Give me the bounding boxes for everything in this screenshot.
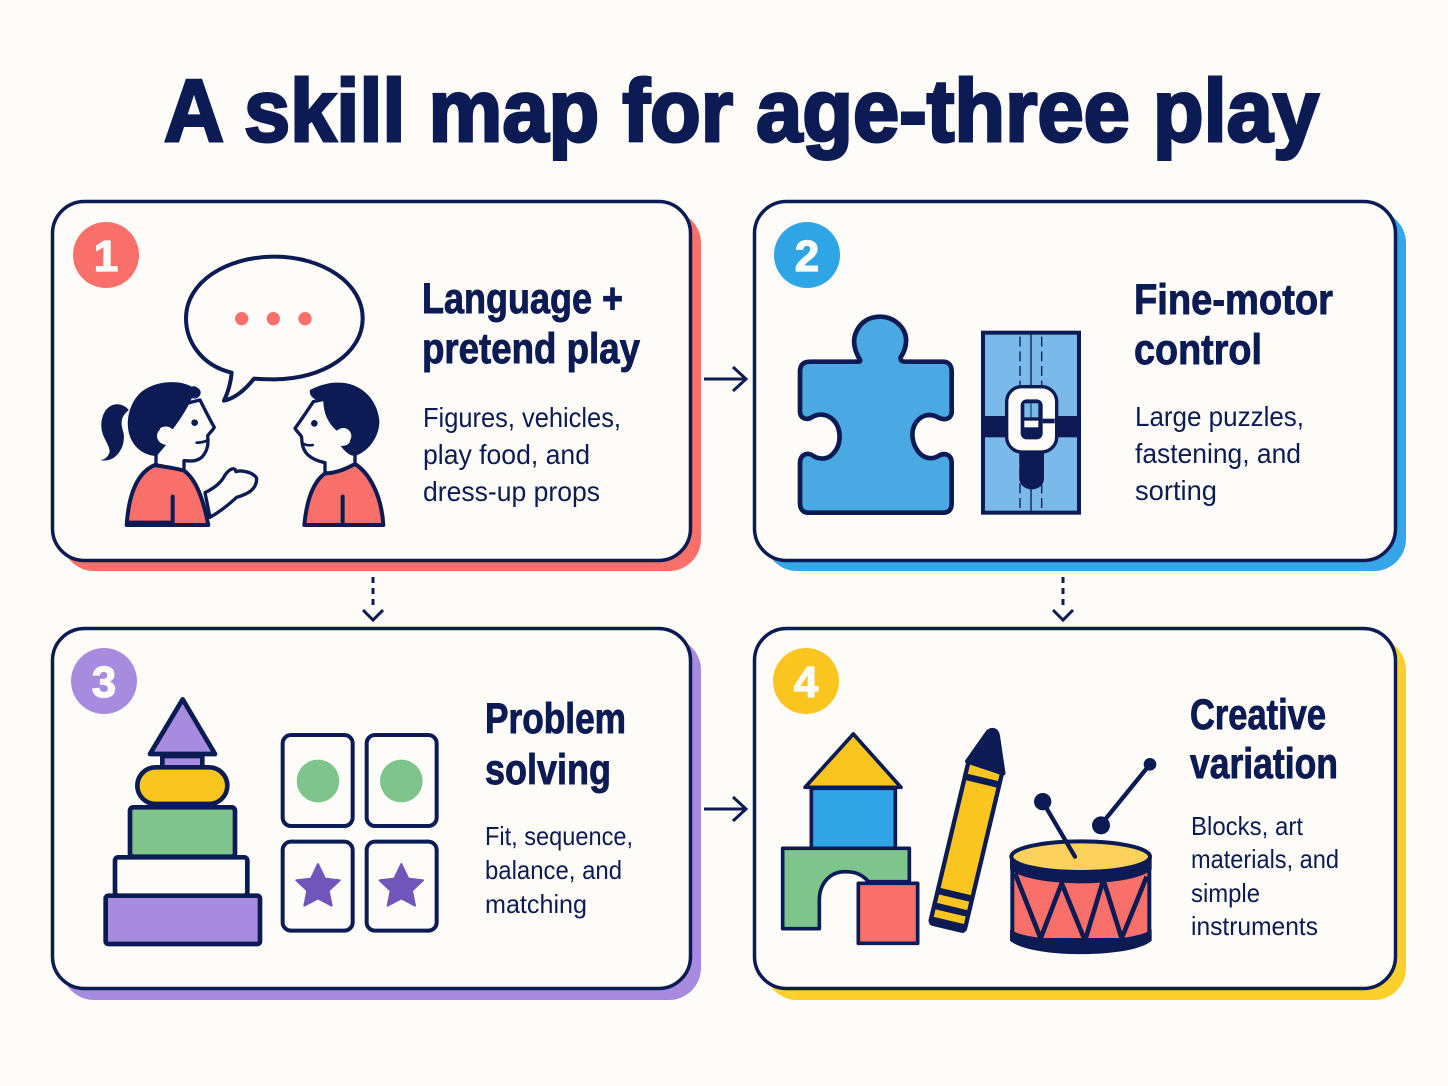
arrow: 1 to 3 (363, 577, 383, 620)
description: Blocks, art (1191, 811, 1304, 841)
description: Fit, sequence, (485, 821, 633, 851)
description: fastening, and (1135, 438, 1301, 469)
description: simple (1191, 878, 1260, 908)
description: materials, and (1191, 844, 1339, 874)
speech bubble (186, 257, 363, 401)
description (1191, 811, 1339, 941)
description: balance, and (485, 855, 622, 885)
description: Figures, vehicles, (423, 402, 621, 433)
description: matching (485, 889, 587, 919)
girl (102, 382, 257, 525)
description: instruments (1191, 911, 1318, 941)
matching cards (283, 735, 437, 931)
description (1135, 401, 1304, 506)
badge 3: 3 (92, 658, 116, 707)
heading: pretend play (422, 325, 640, 373)
badge 2: 2 (795, 232, 819, 281)
description (423, 402, 621, 507)
arrow: 3 to 4 (704, 797, 746, 821)
heading (1190, 691, 1338, 788)
icon: two children talking (102, 257, 383, 525)
description (485, 821, 633, 919)
heading: control (1134, 326, 1262, 374)
heading (1134, 276, 1333, 374)
icon: blocks, crayon and drum (783, 726, 1156, 954)
badge 4 (773, 648, 839, 714)
heading: Language + (422, 275, 623, 323)
arrow: 2 to 4 (1053, 577, 1073, 620)
badge 1 (73, 222, 139, 288)
heading: Fine-motor (1134, 276, 1333, 324)
description: Large puzzles, (1135, 401, 1304, 432)
description: play food, and (423, 439, 590, 470)
heading: solving (485, 746, 611, 794)
boy (295, 383, 383, 525)
stacking tower (106, 699, 260, 944)
zipper (981, 333, 1081, 513)
heading (422, 275, 640, 373)
crayon (929, 726, 1013, 932)
puzzle piece (800, 317, 952, 513)
heading (485, 695, 626, 794)
heading: Problem (485, 695, 626, 743)
heading: variation (1190, 740, 1338, 788)
badge 3 (71, 648, 137, 714)
drum (1010, 758, 1156, 954)
description: dress-up props (423, 476, 600, 507)
panel: language + pretend play (52, 202, 701, 571)
badge 2 (774, 222, 840, 288)
title: A skill map for age-three play (164, 61, 1319, 160)
badge 4: 4 (794, 658, 819, 707)
building blocks (783, 734, 918, 943)
panel: problem solving (52, 628, 701, 1000)
panel: creative variation (754, 628, 1406, 1000)
heading: Creative (1190, 691, 1326, 739)
icon: stacking tower and matching cards (106, 699, 437, 944)
description: sorting (1135, 475, 1217, 506)
badge 1: 1 (94, 232, 118, 281)
icon: puzzle piece and zipper (800, 317, 1081, 513)
arrow: 1 to 2 (704, 367, 746, 391)
panel: fine-motor control (754, 202, 1406, 571)
